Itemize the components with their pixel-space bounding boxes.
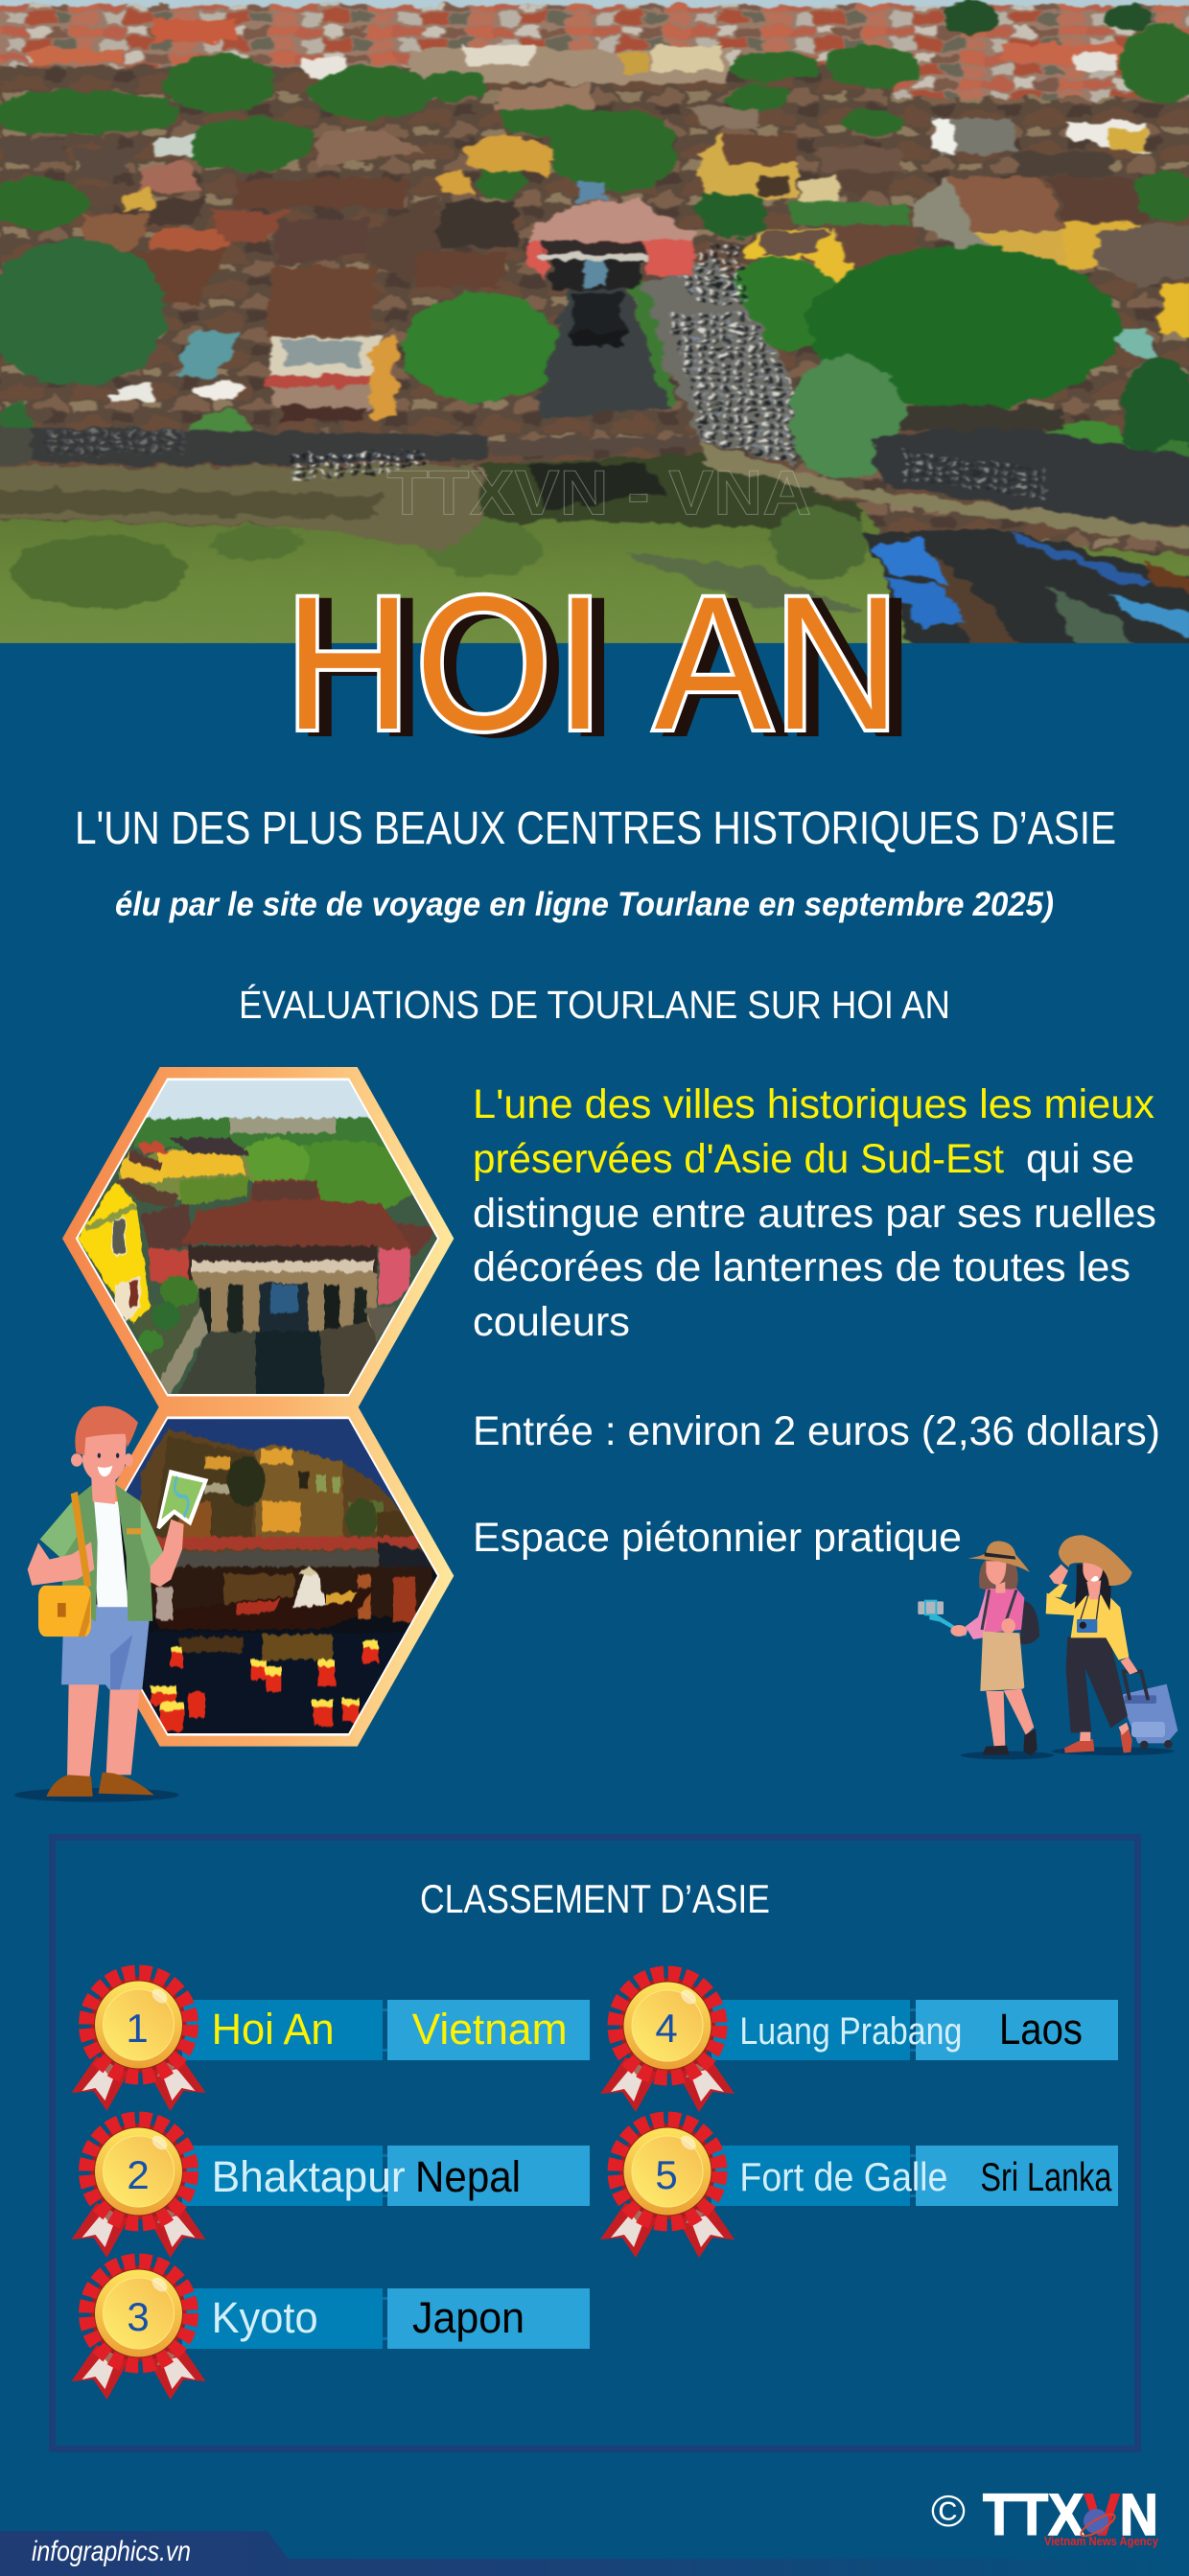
left houses [4,132,549,421]
text: yellow and white description: décorées de lanternes de toutes les [473,1244,1131,1290]
rank 2: 2 [127,2152,150,2197]
rank 4: Laos [999,2005,1083,2054]
text: yellow and white description: L'une des villes historiques les mieux [473,1081,1154,1127]
embankment [0,465,485,550]
photo: aerial view of Hoi An [0,0,1189,675]
rank 4: Luang Prabang [739,2010,962,2053]
hexagon photos [14,1060,454,1802]
rank 1: Vietnam [412,2005,568,2054]
TTXVN logo and copyright: Vietnam News Agency [1044,2534,1159,2548]
roads [31,428,493,465]
text: yellow and white description: qui se [1026,1136,1134,1182]
photo: lanterns at night [96,1419,437,1733]
rank 3: 3 [127,2294,150,2339]
trees far [0,0,1189,237]
title: HOI AN [285,558,899,770]
title: HOI AN [297,562,912,774]
hexagon frame bottom [62,1405,454,1747]
text: yellow and white description: préservées d'Asie du Sud-Est [473,1136,1004,1182]
rank 1: Hoi An [212,2005,335,2054]
footer band with website: infographics.vn [32,2536,191,2567]
footer band with website [0,2531,1189,2576]
text: yellow and white description: couleurs [473,1299,630,1345]
rank 4: 4 [655,2006,678,2051]
big trees [0,240,1189,499]
rank 5: Fort de Galle [739,2154,947,2199]
two tourists illustration [918,1535,1177,1759]
rank 1: 1 [126,2006,149,2051]
subtitle note: élu par le site de voyage en ligne Tourlane en septembre 2025) [115,886,1054,923]
photo: Japanese covered bridge [78,1080,437,1394]
rank 4 [600,1974,1118,2112]
crowd [667,240,747,303]
watermark: TTXVN - VNA [386,458,811,528]
canal [535,289,671,418]
canal and water [0,502,1189,643]
rank 2: Nepal [415,2152,521,2201]
rank 5: Sri Lanka [980,2154,1112,2199]
text: pedestrian area: Espace piétonnier pratique [473,1515,962,1561]
rank 1 [71,1973,590,2111]
man with a map [14,1406,208,1802]
section heading: ÉVALUATIONS DE TOURLANE SUR HOI AN [239,983,950,1027]
TTXVN logo and copyright: © [931,2486,966,2536]
boats [861,527,1189,643]
rank 5 [600,2120,1118,2258]
panel: Asia ranking [52,1837,1137,2448]
ranking panel frame [52,1837,1137,2448]
TTXVN logo and copyright: TTXVN [983,2482,1158,2547]
text: yellow and white description [473,1081,1156,1345]
rank 2 [71,2120,590,2258]
rank 3: Kyoto [212,2293,318,2342]
rank 2: Bhaktapur [212,2152,406,2201]
covered bridge [576,182,607,200]
ranking heading: CLASSEMENT D’ASIE [420,1876,770,1921]
text: entry price: Entrée : environ 2 euros (2,36 dollars) [473,1408,1160,1454]
rank 3 [71,2262,590,2400]
rank 5: 5 [655,2152,678,2197]
right houses [497,83,1189,357]
rank 3: Japon [412,2293,525,2342]
hexagon frame top [62,1067,454,1409]
text: yellow and white description: distingue entre autres par ses ruelles [473,1191,1156,1237]
